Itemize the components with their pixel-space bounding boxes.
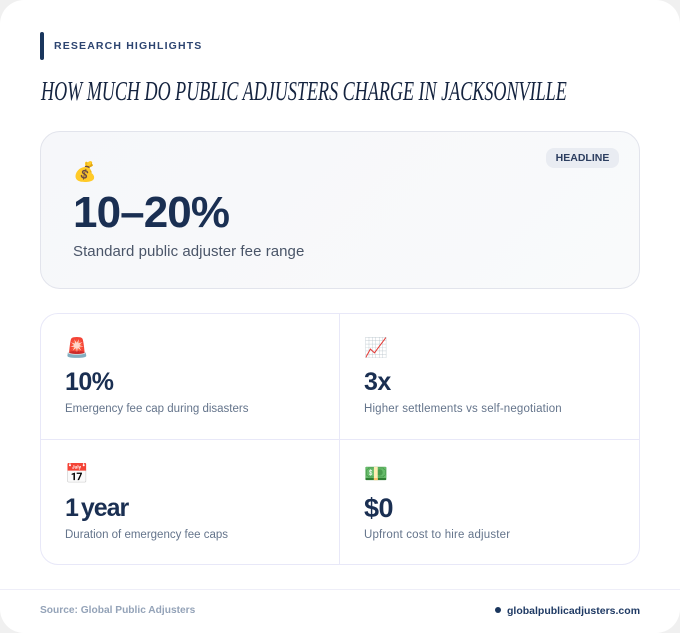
eyebrow label: RESEARCH HIGHLIGHTS — [54, 40, 202, 52]
panel: headline stat — [40, 131, 640, 289]
value: $0 — [364, 493, 393, 523]
vertical divider — [339, 314, 340, 564]
icon: money: 💵 — [364, 462, 388, 485]
stat: cap duration — [65, 462, 228, 541]
icon: calendar: 📅 — [65, 462, 89, 485]
icon: dot — [495, 607, 501, 613]
source note: Source: Global Public Adjusters — [40, 605, 195, 616]
icon: siren: 🚨 — [65, 336, 89, 359]
icon: money bag: 💰 — [73, 160, 97, 183]
footer divider — [0, 589, 680, 590]
stat: upfront cost — [364, 462, 510, 541]
horizontal divider — [41, 439, 639, 440]
title: HOW MUCH DO PUBLIC ADJUSTERS CHARGE IN JACKSONVILLE — [41, 76, 567, 106]
description: Higher settlements vs self-negotiation — [364, 403, 562, 415]
badge: headline: HEADLINE — [556, 152, 609, 164]
stat: emergency cap — [65, 336, 248, 415]
description: Duration of emergency fee caps — [65, 529, 228, 541]
panel: stat grid — [40, 313, 640, 565]
value: 3x — [364, 368, 391, 396]
headline value: 10–20% — [73, 188, 229, 237]
stat: higher settlements — [364, 336, 562, 415]
website: globalpublicadjusters.com — [507, 605, 640, 617]
badge: headline — [546, 148, 619, 168]
description: Upfront cost to hire adjuster — [364, 529, 510, 541]
footer site link — [495, 605, 640, 617]
value: 1 year — [65, 494, 128, 522]
description: Emergency fee cap during disasters — [65, 403, 248, 415]
accent bar — [40, 32, 44, 60]
headline description: Standard public adjuster fee range — [73, 243, 304, 260]
value: 10% — [65, 368, 114, 396]
icon: chart: 📈 — [364, 336, 388, 359]
